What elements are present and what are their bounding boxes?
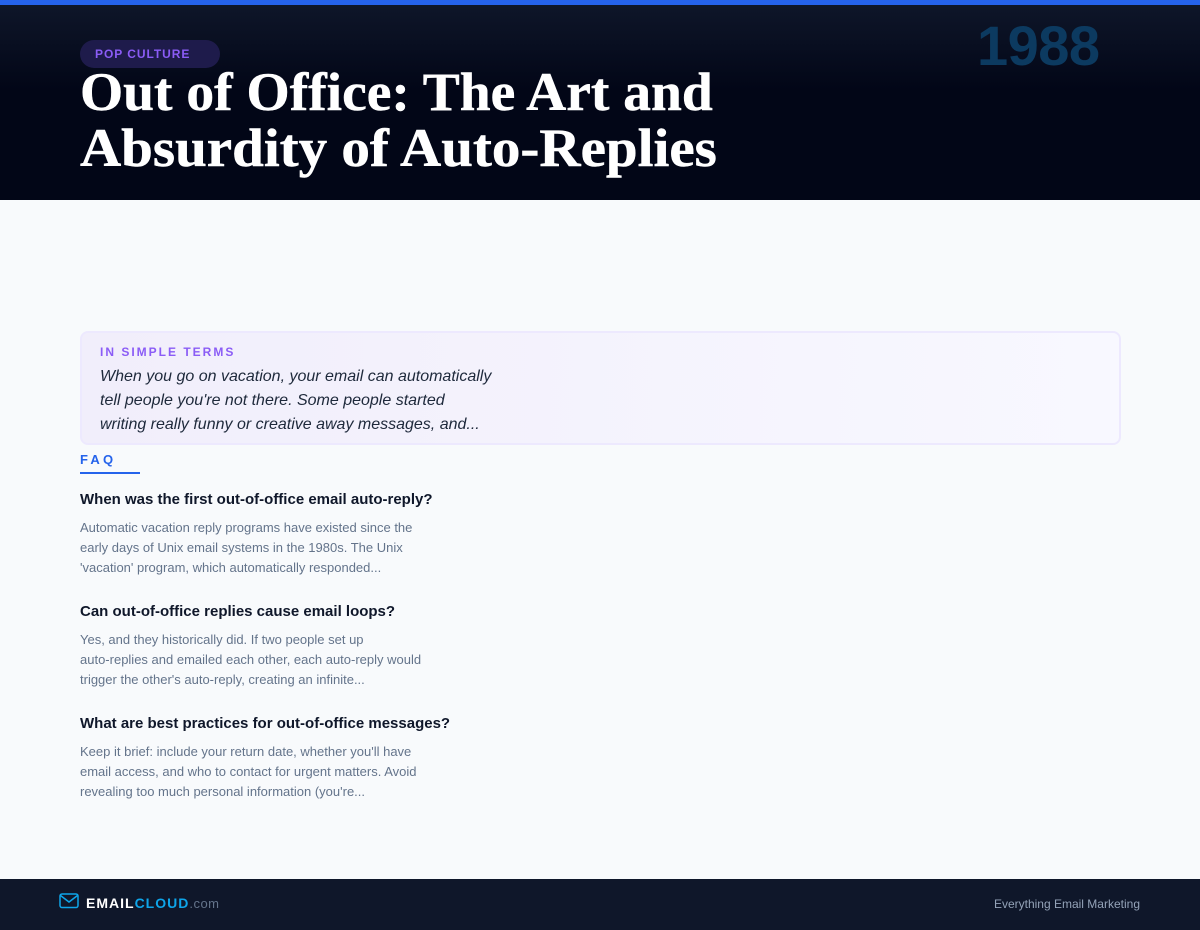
panel text: writing really funny or creative away messages, and... [100,416,480,433]
answer 1: Automatic vacation reply programs have existed since the early days of Unix email systems in the 1980s. The Unix 'vacation' program, which automatically responded... [80,520,412,575]
title [80,62,717,178]
panel text: When you go on vacation, your email can automatically [100,368,491,385]
title: Out of Office: The Art and [80,62,713,122]
tagline: Everything Email Marketing [994,897,1140,911]
answer 2: Yes, and they historically did. If two people set up auto-replies and emailed each other, each auto-reply would trigger the other's auto-reply, creating an infinite... [80,632,421,687]
brand wordmark: EMAILCLOUD.com [86,895,220,911]
year watermark: 1988 [977,14,1100,77]
FAQ heading [80,452,140,474]
question 2: Can out-of-office replies cause email loops? [80,603,395,620]
answer 3: Keep it brief: include your return date, whether you'll have email access, and who to contact for urgent matters. Avoid revealing too much personal information (you're... [80,744,416,799]
FAQ heading: FAQ [80,452,116,467]
title: Absurdity of Auto-Replies [80,118,717,178]
category badge [80,40,220,68]
panel: in simple terms [80,331,1121,445]
footer [0,879,1200,930]
top accent bar [0,0,1200,5]
panel text: tell people you're not there. Some people started [100,392,445,409]
question 3: What are best practices for out-of-office messages? [80,715,450,732]
category badge: POP CULTURE [95,47,190,61]
icon: envelope [59,893,79,908]
panel text [100,368,492,433]
header banner [0,0,1200,200]
FAQ list [80,491,450,799]
question 1: When was the first out-of-office email auto-reply? [80,491,433,508]
panel label: IN SIMPLE TERMS [100,345,235,359]
